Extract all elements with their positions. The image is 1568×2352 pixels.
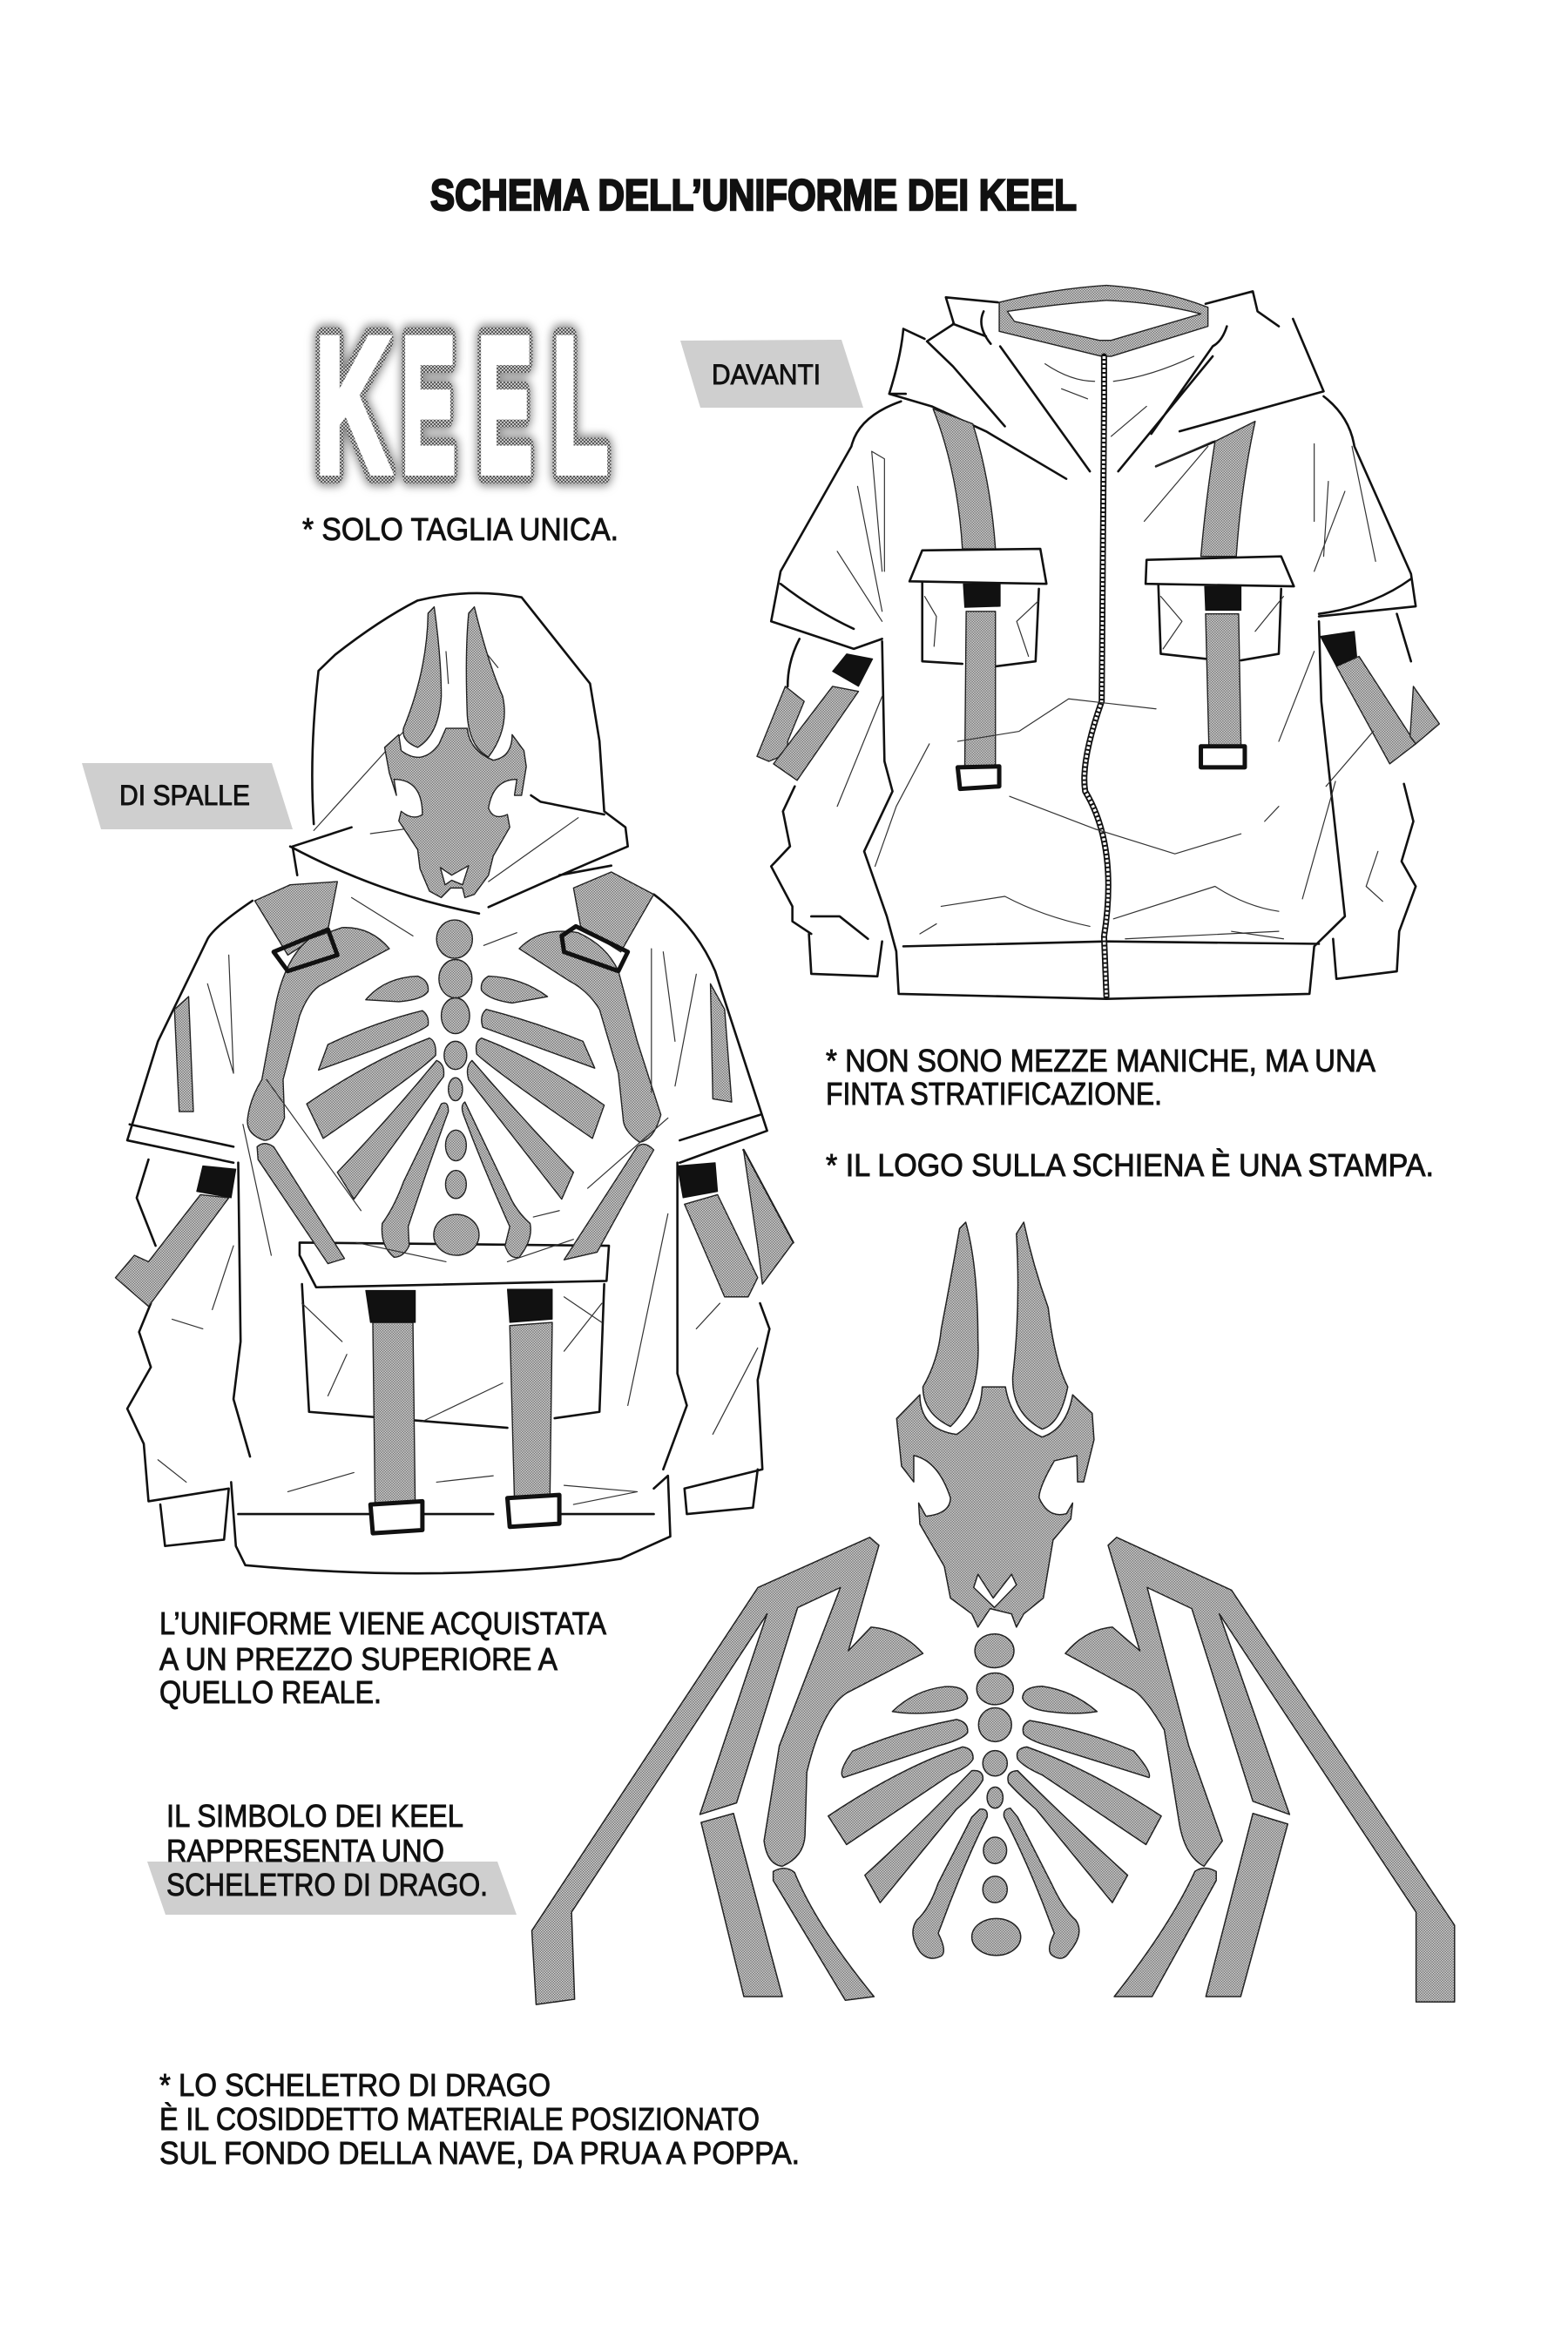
text: L (552, 298, 608, 512)
note: price (159, 1605, 606, 1710)
shoulder buckles (274, 926, 628, 971)
buckles and lower straps (957, 584, 1245, 789)
logo: KEEL: K (315, 298, 390, 512)
spine (434, 920, 479, 1255)
fold lines (837, 356, 1382, 939)
footnote: dragon skeleton: * LO SCHELETRO DI DRAGO (159, 2067, 551, 2103)
upper straps (933, 409, 1255, 557)
hood collar band (999, 286, 1208, 356)
note: dragon skeleton symbol: SCHELETRO DI DRAGO. (166, 1867, 488, 1903)
note: back logo: * IL LOGO SULLA SCHIENA È UNA STAMPA. (826, 1147, 1434, 1183)
note: price: A UN PREZZO SUPERIORE A (159, 1641, 558, 1677)
horns (923, 1222, 1068, 1429)
label: front (680, 340, 863, 408)
garment outline (889, 291, 1323, 479)
fold lines (158, 897, 758, 1504)
note: dragon skeleton symbol (147, 1798, 517, 1915)
ribs (828, 1686, 1161, 1958)
note: sleeves: FINTA STRATIFICAZIONE. (826, 1076, 1162, 1112)
logo: KEEL: E (402, 298, 456, 512)
text: L (552, 298, 608, 512)
logo: KEEL: K (315, 298, 390, 512)
hood (290, 593, 628, 914)
drawing: jacket back view (116, 593, 793, 1573)
pockets (909, 549, 1294, 666)
logo: KEEL: K (315, 298, 390, 512)
skull (896, 1387, 1094, 1627)
pocket straps and buckles (366, 1289, 559, 1533)
drawing: jacket front view (757, 286, 1439, 999)
footnote: dragon skeleton: È IL COSIDDETTO MATERIALE POSIZIONATO (159, 2101, 760, 2137)
zipper (1085, 356, 1108, 997)
logo: KEEL: E (477, 298, 532, 512)
left wing (532, 1538, 923, 2004)
sleeve straps (757, 632, 1439, 781)
note: dragon skeleton symbol: RAPPRESENTA UNO (166, 1833, 444, 1869)
label: back (82, 763, 293, 829)
note: price: L’UNIFORME VIENE ACQUISTATA (159, 1605, 606, 1641)
drawing: dragon skeleton logo (532, 1222, 1455, 2004)
text: L (552, 298, 608, 512)
footnote: dragon skeleton: SUL FONDO DELLA NAVE, DA PRUA A POPPA. (159, 2135, 800, 2171)
label: front: DAVANTI (712, 359, 821, 390)
logo: KEEL: E (402, 298, 456, 512)
shoulder straps (174, 872, 732, 1112)
sleeve straps (116, 1150, 793, 1307)
note: sleeves (826, 1043, 1375, 1112)
wing bones (247, 928, 661, 1264)
footnote: dragon skeleton (159, 2067, 800, 2171)
label: back: DI SPALLE (119, 780, 250, 811)
logo: KEEL: E (402, 298, 456, 512)
right wing (1065, 1538, 1455, 2002)
note: sleeves: * NON SONO MEZZE MANICHE, MA UNA (826, 1043, 1375, 1078)
logo: KEEL: E (477, 298, 532, 512)
logo: KEEL (315, 298, 608, 512)
back pocket (300, 1242, 609, 1428)
ribs (307, 977, 605, 1258)
title: SCHEMA DELL’UNIFORME DEI KEEL (430, 171, 1077, 220)
note: one size only: * SOLO TAGLIA UNICA. (302, 511, 618, 547)
spine (972, 1634, 1021, 1956)
body outline (127, 895, 793, 1573)
note: price: QUELLO REALE. (159, 1674, 382, 1710)
skull print (385, 607, 526, 897)
logo: KEEL: E (477, 298, 532, 512)
note: dragon skeleton symbol: IL SIMBOLO DEI KEEL (166, 1798, 463, 1834)
